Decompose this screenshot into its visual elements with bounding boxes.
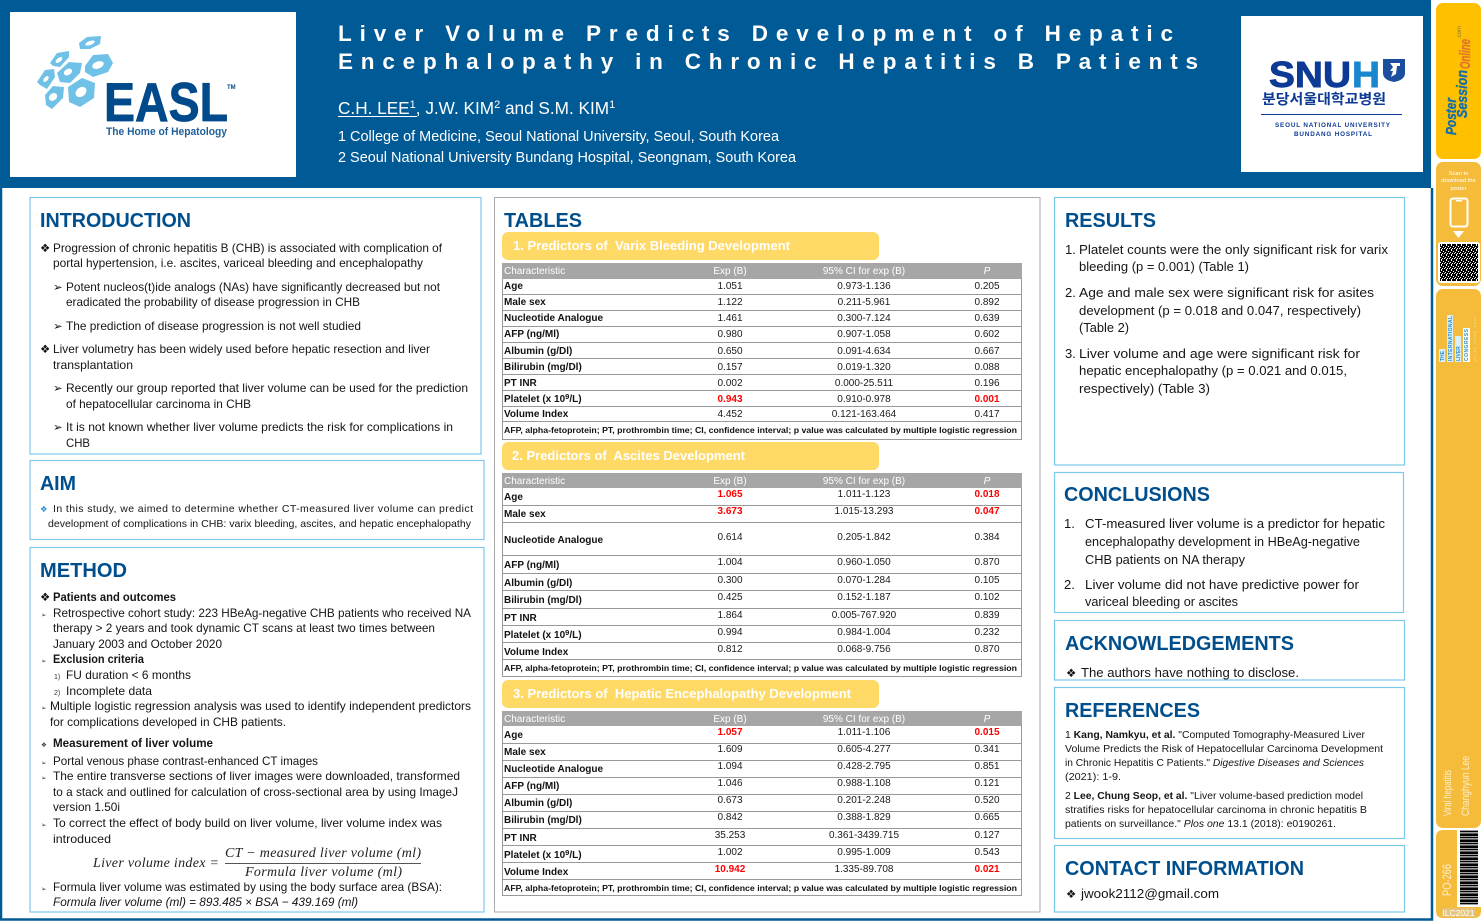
congress logo: LIVER [1456,346,1462,361]
introduction text: Progression of chronic hepatitis B (CHB) is associated with complication of [53,241,443,255]
congress logo: INTERNATIONAL [1448,316,1454,361]
sidebar: scan tab with QR code: download the [1441,178,1476,184]
table 1: Platelet (x 10 [504,394,565,405]
logo: SNUH: H [1352,54,1380,95]
reference list: 1 Kang, Namkyu, et al. "Computed Tomography-Measured Liver [1065,729,1365,741]
method: formula liver volume: Formula liver volume (ml) = 893.485 × BSA − 439.169 (ml) [53,895,358,909]
table 1: Volume Index [504,409,569,420]
table 3: 10.942 [715,864,746,875]
affiliations [338,129,796,166]
panel: method [30,548,484,912]
formula: liver volume index [92,846,421,880]
sidebar: congress and author tab: Changhyun Lee [1460,756,1472,816]
table 3 [502,711,1022,896]
aim text: ❖ [40,505,48,515]
method: patients and outcomes: Patients and outcomes [53,590,176,604]
QR code [1438,242,1480,283]
logo: EASL: TM [227,85,236,91]
formula: liver volume index: Liver volume index = [92,856,219,871]
table 2: 1.065 [717,489,743,500]
table 2: Bilirubin (mg/Dl) [504,595,582,606]
table 3: Platelet (x 10 [504,850,565,861]
authors: C.H. LEE [338,98,410,118]
table 2: 1.004 [717,557,743,568]
results list: Age and male sex were significant risk for asites [1079,285,1375,300]
table 2: Male sex [504,509,546,520]
introduction text: It is not known whether liver volume predicts the risk for complications in [66,420,453,434]
table 1: Albumin (g/Dl) [504,346,572,357]
table 2: 0.070-1.284 [837,575,891,586]
aim text: development of complications in CHB: varix bleeding, ascites, and hepatic encephalopathy [48,518,472,530]
table 1: Nucleotide Analogue [504,313,604,324]
logo: SNUH [1241,16,1423,172]
table 1: 0.300-7.124 [837,313,891,324]
table 3 title [502,680,879,708]
heading: acknowledgements: ACKNOWLEDGEMENTS [1065,633,1294,655]
table 1: 1.122 [717,297,743,308]
table 2: 3.673 [717,506,743,517]
table 1: 0.417 [974,409,1000,420]
table 2: P [984,476,991,487]
table 1: 0.091-4.634 [837,346,891,357]
results list: respectively) (Table 3) [1079,381,1210,396]
table 2: PT INR [504,613,538,624]
table 3: 0.388-1.829 [837,812,891,823]
formula: liver volume index: CT − measured liver volume (ml) [225,846,421,861]
method: patients and outcomes: therapy > 2 years and took dynamic CT scans at least two times between [53,621,435,635]
contact email: jwook2112@gmail.com [1080,886,1219,901]
table 3: 1.335-89.708 [835,864,894,875]
table 3: /L) [569,850,582,861]
introduction text: eradicated the probability of disease progression in CHB [66,295,360,309]
table 2: 0.205-1.842 [837,532,891,543]
table 3: AFP, alpha-fetoprotein; PT, prothrombin time; CI, confidence interval; p value was calculated by multiple logistic regression [504,883,1017,893]
table 2: 1.015-13.293 [835,506,894,517]
table 3: 0.851 [974,761,1000,772]
table 2: 0.047 [974,506,1000,517]
table 1: 0.892 [974,297,1000,308]
table 1: Male sex [504,297,546,308]
introduction text: transplantation [53,358,133,372]
table 3: P [984,714,991,725]
table 3: 1.609 [717,744,743,755]
table 2: AFP, alpha-fetoprotein; PT, prothrombin time; CI, confidence interval; p value was calculated by multiple logistic regression [504,663,1017,673]
sidebar: PosterSessionOnline tab: Session [1454,70,1471,118]
introduction text: ❖ [40,342,50,356]
table 3: PT INR [504,833,538,844]
method: patients and outcomes: Incomplete data [66,684,152,698]
table 1: 0.000-25.511 [835,378,894,389]
table 1: AFP, alpha-fetoprotein; PT, prothrombin time; CI, confidence interval; p value was calculated by multiple logistic regression [504,425,1017,435]
table 2: AFP (ng/Ml) [504,560,559,571]
table 2: 9 [565,628,569,637]
table 3: 0.543 [974,847,1000,858]
method: patients and outcomes: Exclusion criteria [53,652,144,666]
panel: tables [494,198,1040,912]
table 3: Volume Index [504,867,569,878]
table 1: 0.157 [717,362,743,373]
method: patients and outcomes [40,590,471,729]
table 2: Platelet (x 10 [504,630,565,641]
table 2: Nucleotide Analogue [504,535,604,546]
congress logo [1439,315,1477,362]
heading: conclusions: CONCLUSIONS [1064,484,1210,506]
conclusions list: variceal bleeding or ascites [1085,594,1238,609]
sidebar: scan tab with QR code [1436,162,1481,286]
table 3: 0.021 [974,864,1000,875]
heading: method: METHOD [40,560,127,582]
table 2: 0.018 [974,489,1000,500]
results list: hepatic encephalopathy (p = 0.021 and 0.015, [1079,363,1347,378]
congress logo: THE [1440,350,1446,361]
table 2: 0.068-9.756 [837,644,891,655]
conclusions list: Liver volume did not have predictive power for [1085,577,1360,592]
table 3: 0.201-2.248 [837,795,891,806]
table 3: 0.988-1.108 [837,778,891,789]
table 2: Albumin (g/Dl) [504,578,572,589]
sidebar: congress and author tab: Viral hepatitis [1442,770,1454,816]
heading: aim: AIM [40,473,76,495]
table 2: 0.994 [717,627,743,638]
table 1: 0.973-1.136 [837,281,891,292]
table 3: Male sex [504,747,546,758]
table 3: 35.253 [715,830,746,841]
table 1: Characteristic [504,266,565,277]
table 1: AFP (ng/Ml) [504,329,559,340]
panel: references [1054,688,1404,838]
table 3: 0.520 [974,795,1000,806]
table 3: 1.046 [717,778,743,789]
table 1: 0.001 [974,394,1000,405]
sidebar: PosterSessionOnline tab: Online [1457,39,1474,69]
table 3: 95% CI for exp (B) [823,714,905,725]
table 2: 0.105 [974,575,1000,586]
table 2 [502,473,1022,676]
aim text: In this study, we aimed to determine whether CT-measured liver volume can predict [53,503,473,515]
sidebar: congress and author tab [1436,289,1481,828]
congress logo: CONGRESS [1464,328,1470,361]
table 2: Volume Index [504,647,569,658]
table 3: 0.673 [717,795,743,806]
table 3: AFP (ng/Ml) [504,781,559,792]
introduction text: ➢ [53,319,63,333]
table 2: 1.864 [717,610,743,621]
table 2: 0.870 [974,644,1000,655]
method: formula liver volume: Formula liver volume was estimated by using the body surface area (BSA): [53,880,442,894]
authors: 2 [494,99,500,111]
method: measurement of liver volume: Portal venous phase contrast-enhanced CT images [53,754,318,768]
introduction text: ➢ [53,381,63,395]
panel: introduction [30,198,481,454]
conclusions list [1064,516,1386,609]
sidebar: scan tab with QR code: poster [1450,186,1467,192]
results list: Liver volume and age were significant risk for [1079,346,1361,361]
panel: contact information [1054,846,1404,912]
logo: SNUH: 분당서울대학교병원 [1262,89,1386,109]
method: patients and outcomes: ❖ [40,590,50,604]
table 1: 0.650 [717,346,743,357]
method: measurement of liver volume: to a stack and outlined for calculation of cross-sectional area by using ImageJ [53,785,458,799]
sidebar: poster id tab [1436,830,1481,918]
table 3: 9 [565,848,569,857]
table 1: Exp (B) [713,266,747,277]
table 1: 0.907-1.058 [837,329,891,340]
panel: results [1054,198,1404,465]
conclusions list: encephalopathy development in HBeAg-negative [1085,534,1360,549]
method: patients and outcomes: 2) [54,690,60,697]
sidebar: scan tab with QR code: Scan to [1449,171,1468,177]
logo: SNUH: SEOUL NATIONAL UNIVERSITY [1275,122,1391,129]
sidebar: PosterSessionOnline tab [1436,3,1481,159]
table 1 title: 1. Predictors of Varix Bleeding Development [513,238,791,253]
panel: acknowledgements [1054,620,1404,680]
introduction text: Potent nucleos(t)ide analogs (NAs) have significantly decreased but not [66,280,441,294]
results list: 1. [1065,242,1076,257]
conclusions list: CHB patients on NA therapy [1085,552,1245,567]
table 3: 0.995-1.009 [837,847,891,858]
heading: results: RESULTS [1065,210,1156,232]
reference list: stratifies risks for hepatocellular carcinoma in chronic hepatitis B [1065,804,1367,816]
table 1: 4.452 [717,409,743,420]
table 2: 0.005-767.920 [832,610,897,621]
table 2: 1.011-1.123 [838,489,891,500]
results list: 2. [1065,285,1076,300]
table 2: 0.425 [717,592,743,603]
logo: EASL [10,12,296,177]
results list: Platelet counts were the only significant risk for varix [1079,242,1388,257]
heading: tables: TABLES [504,210,582,232]
table 3: Bilirubin (mg/Dl) [504,815,582,826]
reference list: in Chronic Hepatitis C Patients." Digestive Diseases and Sciences [1065,757,1365,769]
table 2: 0.614 [717,532,743,543]
table 3: 0.341 [974,744,1000,755]
sidebar: PosterSessionOnline tab: .com [1457,26,1463,39]
method: measurement of liver volume: ➢ [41,821,47,829]
heading: contact information: CONTACT INFORMATION [1065,858,1304,880]
table 2: 0.984-1.004 [837,627,891,638]
table 1: 1.461 [717,313,743,324]
authors: 1 [410,99,416,111]
introduction text: portal hypertension, i.e. ascites, variceal bleeding and encephalopathy [53,256,423,270]
authors: , J.W. KIM [416,98,494,118]
results list: 3. [1065,346,1076,361]
table 1: 0.196 [974,378,1000,389]
table 3: 0.127 [974,830,1000,841]
method: formula liver volume [41,880,442,909]
introduction text: CHB [66,436,90,450]
table 2: 0.839 [974,610,1000,621]
method: measurement of liver volume: Measurement of liver volume [53,736,213,750]
table 1: 0.205 [974,281,1000,292]
method: measurement of liver volume: The entire transverse sections of liver images were downloaded, transformed [53,769,460,783]
table 1: 9 [565,392,569,401]
acknowledgement text: The authors have nothing to disclose. [1081,665,1299,680]
method: measurement of liver volume: ➢ [41,774,47,782]
table 3 title: 3. Predictors of Hepatic Encephalopathy Development [513,686,852,701]
conclusions list: 2. [1064,577,1075,592]
table 1: 0.980 [717,329,743,340]
method: patients and outcomes: ➢ [41,611,47,619]
table 1: Age [504,281,523,292]
method: measurement of liver volume: introduced [53,832,111,846]
method: patients and outcomes: Retrospective cohort study: 223 HBeAg-negative CHB patients who received NA [53,606,471,620]
table 1: 0.910-0.978 [837,394,891,405]
acknowledgement text: ❖ [1066,666,1076,680]
introduction text: Liver volumetry has been widely used before hepatic resection and liver [53,342,430,356]
table 2: Exp (B) [713,476,747,487]
method: patients and outcomes: for complications developed in CHB patients. [50,715,286,729]
table 1 title [502,232,879,260]
table 1: 0.667 [974,346,1000,357]
table 1: 0.002 [717,378,743,389]
table 1: PT INR [504,378,538,389]
table 2: 0.232 [974,627,1000,638]
table 2: 0.812 [717,644,743,655]
aim text [40,503,473,530]
sidebar: poster id tab: ILC2021 [1442,908,1475,918]
table 1 [502,263,1022,440]
icon: phone [1450,198,1468,226]
affiliations: 2 Seoul National University Bundang Hospital, Seongnam, South Korea [338,150,796,166]
results list: development (p = 0.018 and 0.047, respectively) [1079,303,1361,318]
table 2: 95% CI for exp (B) [823,476,905,487]
reference list: patients on surveillance." Plos one 13.1 (2018): e0190261. [1065,818,1336,830]
authors: 1 [609,99,615,111]
introduction text: of hepatocellular carcinoma in CHB [66,397,251,411]
table 3: Nucleotide Analogue [504,764,604,775]
table 1: 0.211-5.961 [838,297,891,308]
method: formula liver volume: ➢ [41,885,47,893]
table 1: 0.639 [974,313,1000,324]
reference list [1065,729,1383,830]
reference list: (2021): 1-9. [1065,771,1121,783]
panel: aim [30,460,484,540]
logo: SNUH: BUNDANG HOSPITAL [1294,131,1372,138]
sidebar: poster id tab: PO-266 [1440,864,1454,896]
table 1: 0.019-1.320 [837,362,891,373]
title: Encephalopathy in Chronic Hepatitis B Patients [338,49,1198,74]
method: measurement of liver volume: ➢ [41,759,47,767]
title: Liver Volume Predicts Development of Hepatic [338,21,1173,46]
icon: down arrow [1453,231,1464,238]
table 3: Exp (B) [713,714,747,725]
introduction text [40,241,468,450]
introduction text: ➢ [53,280,63,294]
table 2: 0.384 [974,532,1000,543]
reference list: 2 Lee, Chung Seop, et al. "Liver volume-based prediction model [1065,790,1363,802]
table 1: 0.088 [974,362,1000,373]
table 1: 1.051 [717,281,743,292]
table 1: /L) [569,394,582,405]
panel: conclusions [1054,472,1404,612]
sidebar: PosterSessionOnline tab: Poster [1443,97,1460,135]
method: patients and outcomes: January 2003 and October 2020 [53,637,222,651]
introduction text: ➢ [53,420,63,434]
table 2 title: 2. Predictors of Ascites Development [512,448,746,463]
congress logo: 23-26 JUNE 2021 [1473,316,1477,361]
title [338,21,1198,74]
table 2: Characteristic [504,476,565,487]
heading: introduction: INTRODUCTION [40,210,191,232]
table 3: 0.361-3439.715 [829,830,899,841]
method: measurement of liver volume [41,736,460,846]
method: patients and outcomes: ➢ [41,704,47,712]
method: measurement of liver volume: ❖ [41,741,47,749]
table 1: 0.602 [974,329,1000,340]
table 3: Characteristic [504,714,565,725]
header band [0,0,1431,188]
results list [1065,242,1388,396]
table 3: Albumin (g/Dl) [504,798,572,809]
logo: EASL: EASL [104,71,228,133]
table 3: 0.665 [974,812,1000,823]
conclusions list: CT-measured liver volume is a predictor for hepatic [1085,516,1386,531]
table 2: 0.960-1.050 [837,557,891,568]
method: patients and outcomes: FU duration < 6 months [66,668,191,682]
table 1: Bilirubin (mg/Dl) [504,362,582,373]
method: measurement of liver volume: version 1.50i [53,800,120,814]
logo: EASL: The Home of Hepatology [106,126,228,138]
table 3: 0.605-4.277 [837,744,891,755]
table 3: 1.094 [717,761,743,772]
conclusions list: 1. [1064,516,1075,531]
authors: and S.M. KIM [500,98,609,118]
method: patients and outcomes: ➢ [41,657,47,665]
method: measurement of liver volume: To correct the effect of body build on liver volume, liver volume index was [53,816,442,830]
formula: liver volume index: Formula liver volume (ml) [244,865,402,880]
poster frame [1,188,1432,920]
table 2: 0.870 [974,557,1000,568]
table 1: 95% CI for exp (B) [823,266,905,277]
table 2: 0.102 [974,592,1000,603]
table 1: 0.943 [717,394,743,405]
table 2 title [502,442,879,470]
table 2: Age [504,492,523,503]
table 1: P [984,266,991,277]
authors [338,98,615,118]
table 3: 0.842 [717,812,743,823]
affiliations: 1 College of Medicine, Seoul National University, Seoul, South Korea [338,129,779,145]
table 3: 0.121 [974,778,1000,789]
table 1: 0.121-163.464 [832,409,897,420]
table 3: 0.428-2.795 [837,761,891,772]
introduction text: ❖ [40,241,50,255]
table 3: 1.011-1.106 [838,727,891,738]
method: patients and outcomes: 1) [54,674,60,681]
results list: bleeding (p = 0.001) (Table 1) [1079,259,1249,274]
table 2: 0.300 [717,575,743,586]
contact email: ❖ [1066,887,1076,901]
logo: SNUH: SNU [1269,54,1351,95]
table 3: 1.057 [717,727,743,738]
table 3: 1.002 [717,847,743,858]
table 2: /L) [569,630,582,641]
heading: references: REFERENCES [1065,700,1200,722]
table 3: 0.015 [974,727,1000,738]
introduction text: The prediction of disease progression is not well studied [66,319,361,333]
method: patients and outcomes: Multiple logistic regression analysis was used to identify independent predictors [50,699,471,713]
reference list: Volume Predicts the Risk of Hepatocellular Carcinoma Development [1065,743,1383,755]
introduction text: Recently our group reported that liver volume can be used for the prediction [66,381,468,395]
results list: (Table 2) [1079,320,1129,335]
table 2: 0.152-1.187 [837,592,891,603]
table 3: Age [504,730,523,741]
